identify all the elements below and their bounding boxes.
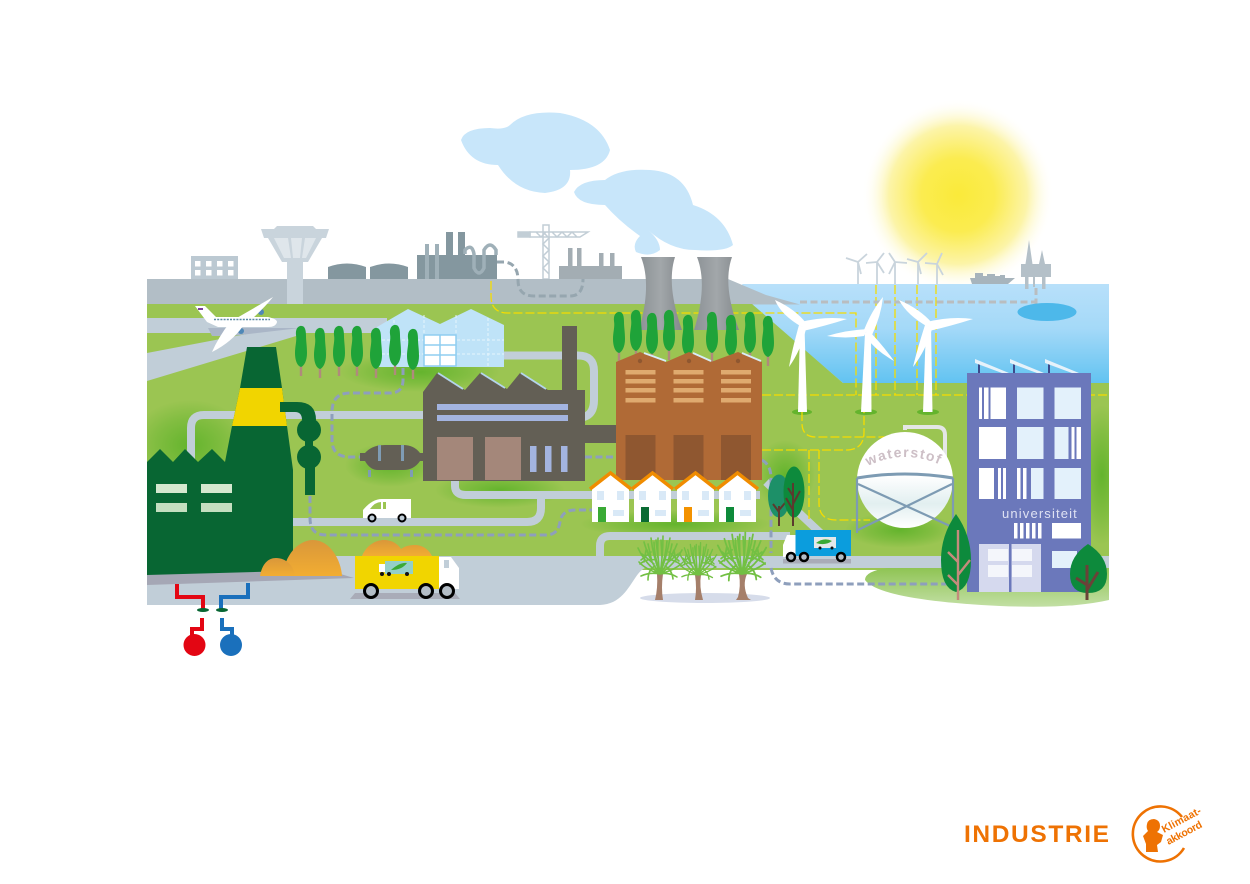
trees beside houses (768, 466, 804, 526)
red pipe (177, 584, 203, 610)
poplar row airport (295, 325, 419, 379)
fuselage (195, 306, 277, 327)
logo wordmark: Klimaat- (1160, 805, 1204, 836)
storage tanks (328, 264, 408, 279)
cooling towers (639, 257, 739, 330)
sphere label: waterstof (865, 449, 942, 465)
control tower (261, 226, 329, 304)
skyline: harbour and industry silhouettes (191, 225, 622, 279)
airplane (195, 297, 300, 352)
turbine 1 (775, 300, 847, 412)
tree in front of university right (1070, 544, 1107, 600)
green pipe scrubber (280, 402, 321, 495)
wind turbines (775, 297, 973, 412)
blue truck (783, 530, 851, 564)
yellow truck (350, 556, 460, 599)
brown factory (616, 352, 762, 480)
yellow chimney band (232, 388, 287, 426)
distant refinery (417, 232, 497, 279)
airport runways (147, 318, 387, 381)
harbour crane (518, 225, 588, 279)
greenhouse (377, 309, 504, 367)
green factory with chimney (147, 347, 293, 575)
ground connection marks (197, 608, 228, 612)
sun (862, 99, 1054, 291)
process vessel (360, 445, 424, 477)
cloud right with smoke (574, 170, 733, 255)
sea (742, 284, 1109, 383)
logo ring (1133, 806, 1184, 861)
green island by university (865, 568, 1109, 607)
university label: universiteit (1002, 506, 1078, 521)
factory windows (156, 484, 232, 512)
cloud left (461, 112, 610, 193)
wings (212, 297, 273, 352)
hot water reservoir (184, 618, 206, 656)
jet engines (258, 309, 264, 315)
houses (590, 473, 758, 522)
truck emblem (379, 561, 413, 576)
land (147, 304, 1109, 570)
blue truck emblem (814, 537, 836, 550)
light windows (1017, 388, 1081, 568)
white van (363, 499, 411, 522)
poplar row at brown factory (613, 310, 774, 366)
tree in front of university left (941, 514, 971, 600)
dark grey factory (423, 326, 616, 481)
entrance (979, 544, 1041, 592)
white windows (979, 388, 1081, 538)
hydrogen sphere (856, 425, 954, 533)
university building (967, 359, 1091, 592)
loading platform (147, 570, 354, 585)
cold water reservoir (220, 618, 242, 656)
main road and quay (147, 556, 1109, 605)
plane shadow (208, 328, 300, 336)
greenhouse door (424, 335, 456, 366)
solar panels (975, 359, 1079, 373)
oil pool (1018, 303, 1076, 321)
grey and blue dashed pipelines (310, 262, 1037, 584)
ship (970, 273, 1015, 284)
willow shadow (640, 593, 770, 603)
logo wordmark: akkoord (1164, 819, 1204, 848)
logo Klimaatakkoord (1133, 805, 1204, 861)
windows (214, 318, 270, 320)
turbine 2 (827, 297, 894, 412)
distant office (191, 256, 238, 279)
distant wind turbines (846, 253, 943, 284)
blue pipe (221, 583, 248, 610)
tail livery (198, 308, 203, 310)
land shading (130, 352, 1126, 548)
offshore rig (1021, 240, 1051, 289)
logo figure (1143, 819, 1163, 852)
yellow power cables (491, 281, 1109, 520)
page title: INDUSTRIE (964, 821, 1109, 848)
local roads (191, 356, 845, 556)
heat network pipes (177, 583, 248, 610)
biomass piles (260, 540, 432, 576)
willows (638, 532, 766, 600)
clouds (461, 112, 733, 255)
harbour quay band (147, 279, 800, 304)
turbine 3 (899, 300, 973, 412)
distant plant right (559, 248, 622, 279)
